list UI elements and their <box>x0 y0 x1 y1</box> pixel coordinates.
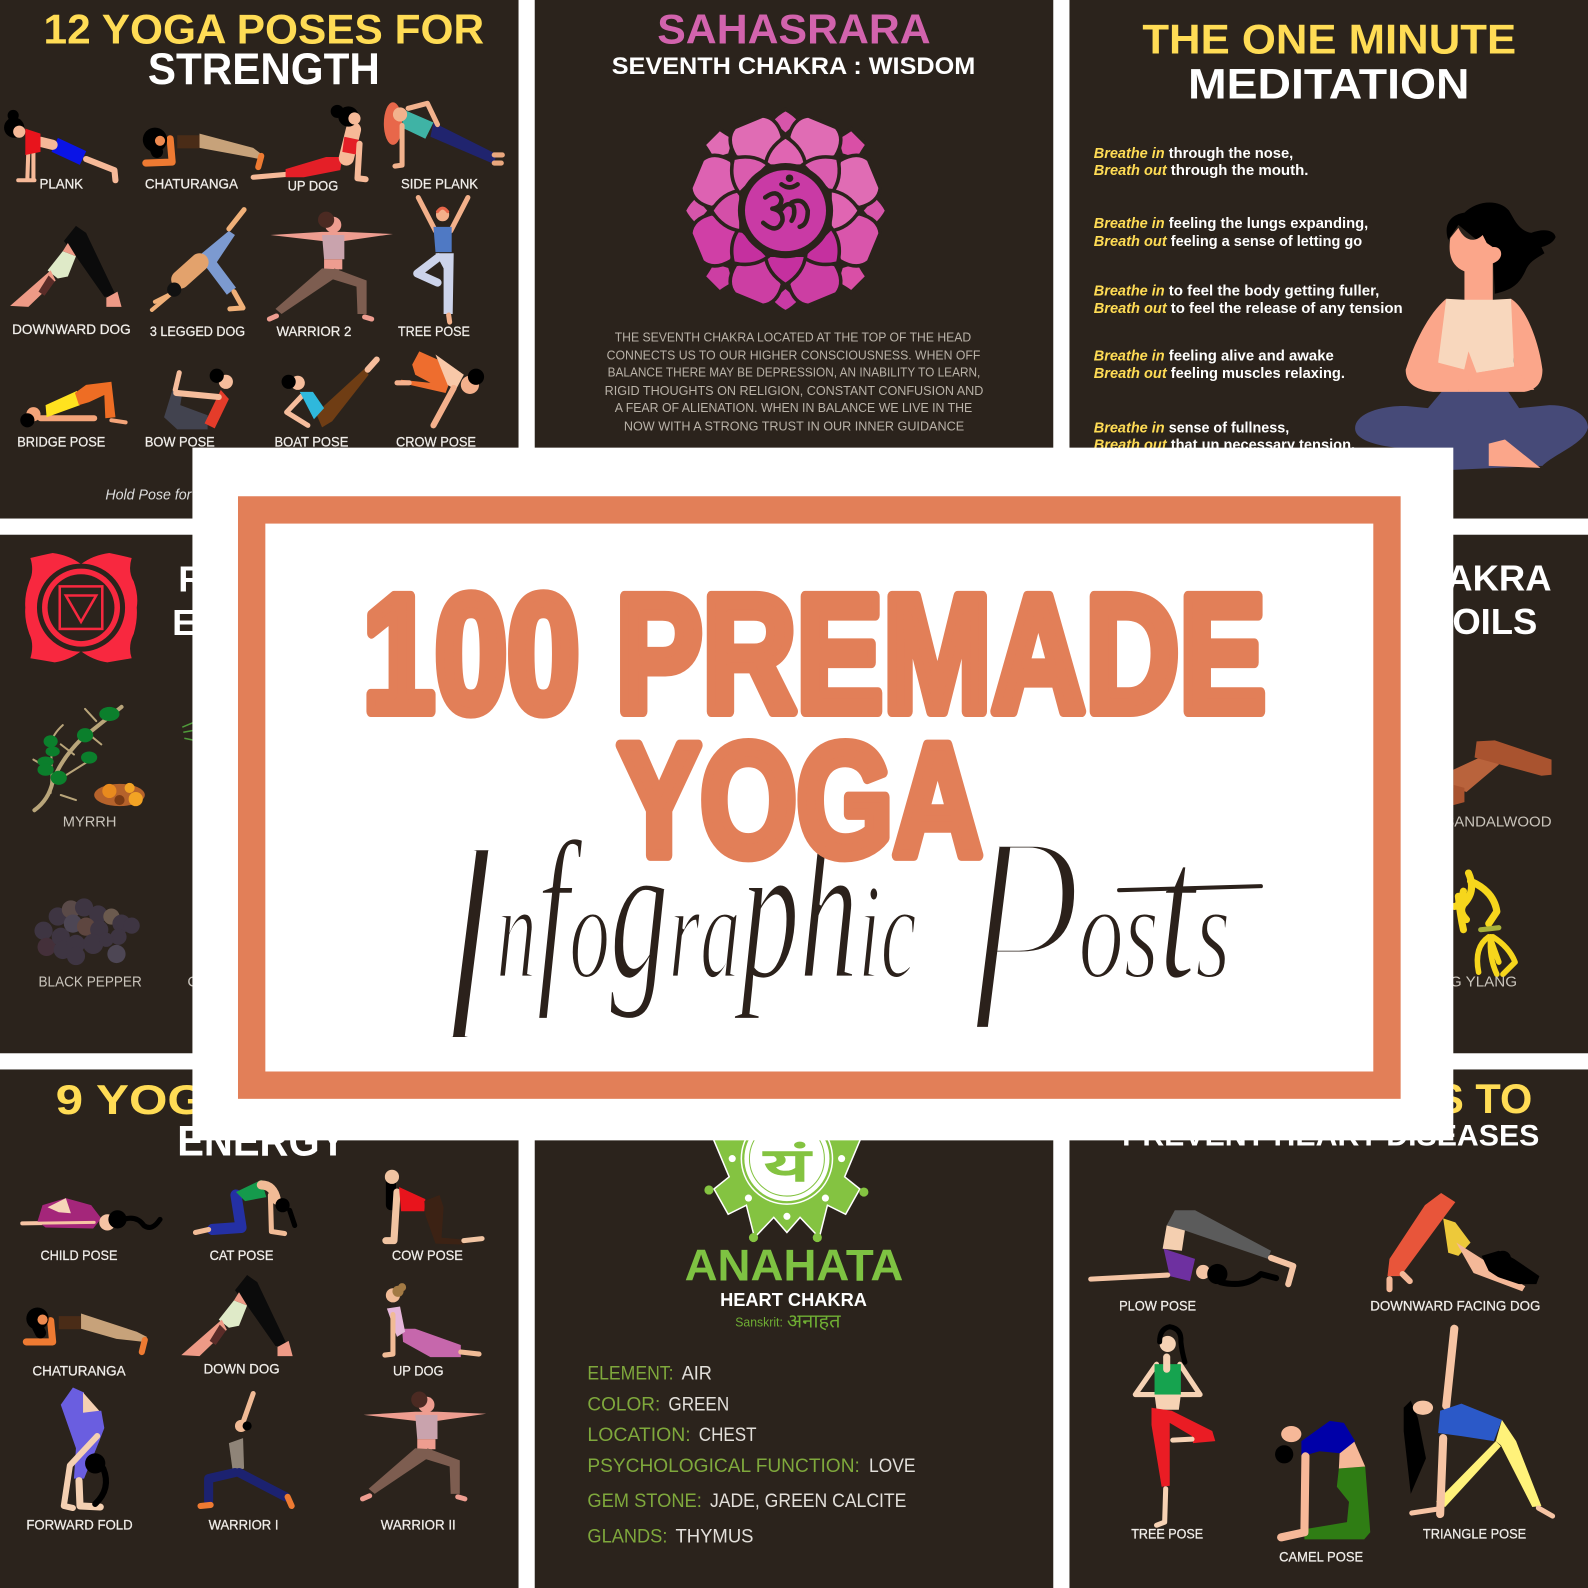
figure: up dog <box>385 1283 479 1357</box>
label: boat pose: BOAT POSE <box>274 435 348 450</box>
heading: root chakra essential oils, clipped: ESSENTIAL OILS <box>1238 601 1537 642</box>
text block: chakra attributes <box>587 1363 916 1547</box>
heading: 12 yoga poses for strength: 12 YOGA POSES FOR <box>44 6 484 53</box>
label: plank: PLANK <box>39 176 83 191</box>
card: central title <box>192 448 1453 1140</box>
text block: seventh chakra description: BALANCE THERE MAY BE DEPRESSION, AN INABILITY TO LEARN, <box>608 366 980 380</box>
figure: tree pose <box>1135 1327 1215 1525</box>
text block: breathing instructions: Breathe in <box>1094 145 1165 162</box>
label: downward dog: DOWNWARD DOG <box>12 322 131 337</box>
heading: anahata: HEART CHAKRA <box>720 1290 867 1310</box>
figure: side plank <box>384 102 502 166</box>
figure: 3 legged dog <box>152 210 244 310</box>
text block: chakra attributes: ELEMENT: <box>587 1363 673 1384</box>
label: up dog: UP DOG <box>393 1363 444 1378</box>
text block: chakra attributes: THYMUS <box>676 1526 753 1547</box>
text block: breathing instructions: Breath out <box>1094 300 1168 317</box>
figure: plow pose <box>1091 1210 1293 1284</box>
figure: bridge pose <box>20 382 126 427</box>
figure: chaturanga <box>26 1307 147 1352</box>
label: tree pose: TREE POSE <box>398 324 470 339</box>
panel: root chakra essential oils, left <box>0 535 519 1053</box>
label: downward facing dog: DOWNWARD FACING DOG <box>1370 1299 1540 1314</box>
label: sanskrit name: Sanskrit: <box>735 1316 783 1330</box>
heading: 12 yoga poses for strength: STRENGTH <box>148 45 380 94</box>
text block: breathing instructions: Breath out <box>1094 365 1168 382</box>
text block: breathing instructions: Breath out <box>1094 233 1168 250</box>
label: ylang ylang: YLANG YLANG <box>1410 973 1517 990</box>
figure: plank <box>4 110 115 180</box>
figure: up dog <box>253 105 366 179</box>
subheading: infographic posts script: P <box>954 771 1084 1097</box>
figure: camel pose <box>1275 1421 1370 1539</box>
figure: boat pose <box>282 360 377 427</box>
icon: crown chakra lotus <box>684 109 887 312</box>
heading: 9 yoga poses energy: ENERGY <box>177 1118 346 1166</box>
label: plow pose: PLOW POSE <box>1119 1299 1196 1314</box>
icon: heart chakra: यं <box>764 1139 812 1191</box>
figure: triangle pose <box>1404 1329 1553 1516</box>
figure: chaturanga <box>143 128 261 167</box>
heading: root chakra essential oils, clipped: ROOT CHAKRA <box>178 558 452 599</box>
text block: chakra attributes: GLANDS: <box>587 1526 667 1547</box>
text block: breathing instructions: Breathe in <box>1094 419 1165 436</box>
text block: seventh chakra description: CONNECTS US TO OUR HIGHER CONSCIOUSNESS. WHEN OFF <box>607 349 981 363</box>
figure: cat pose <box>195 1180 295 1234</box>
figure: tree pose <box>417 197 468 322</box>
label: triangle pose: TRIANGLE POSE <box>1423 1526 1526 1541</box>
heading: root chakra essential oils, clipped <box>1238 557 1552 642</box>
heading: the one minute meditation: THE ONE MINUTE <box>1142 16 1516 63</box>
panel: 12 yoga poses for strength <box>0 0 519 519</box>
text block: breathing instructions: feeling a sense of letting go <box>1171 233 1362 250</box>
text block: seventh chakra description: THE SEVENTH CHAKRA LOCATED AT THE TOP OF THE HEAD <box>615 330 971 344</box>
subheading: infographic posts script: osts <box>1079 801 1230 1020</box>
heading: root chakra essential oils, clipped: ROOT CHAKRA <box>1278 557 1552 598</box>
label: warrior 2: WARRIOR 2 <box>276 324 351 339</box>
label: down dog: DOWN DOG <box>204 1361 280 1376</box>
icon: root chakra <box>25 553 137 662</box>
text block: chakra attributes: PSYCHOLOGICAL FUNCTION: <box>587 1456 860 1477</box>
panel: poses to prevent heart diseases <box>1069 1069 1588 1588</box>
heading: 100 premade yoga: YOGA <box>618 710 982 889</box>
text block: chakra attributes: LOCATION: <box>587 1425 691 1446</box>
panel: anahata heart chakra <box>535 1069 1053 1588</box>
heading: sahasrara: SAHASRARA <box>657 6 931 53</box>
heading: root chakra essential oils, clipped <box>172 558 471 643</box>
text block: breathing instructions: Breath out <box>1094 437 1168 454</box>
text block: seventh chakra description: RIGID THOUGHTS ON RELIGION, CONSTANT CONFUSION AND <box>605 384 983 398</box>
figure: warrior I <box>201 1394 292 1506</box>
label: warrior I: WARRIOR I <box>209 1517 279 1532</box>
heading: 9 yoga poses energy <box>56 1076 542 1166</box>
subheading: infographic posts script <box>427 771 1230 1109</box>
figure: bow pose <box>164 369 233 429</box>
heading: yoga poses to prevent heart diseases <box>1122 1075 1539 1152</box>
text block: breathing instructions: sense of fullness, <box>1169 419 1289 436</box>
figure: cow pose <box>385 1170 482 1245</box>
text block: breathing instructions: feeling alive and awake <box>1169 348 1334 365</box>
panel: one minute meditation <box>1069 0 1588 519</box>
heading: the one minute meditation: MEDITATION <box>1188 61 1470 109</box>
icon: sandalwood logs <box>1453 740 1552 805</box>
label: side plank: SIDE PLANK <box>401 176 478 191</box>
text block: seventh chakra description <box>605 330 983 433</box>
label: bridge pose: BRIDGE POSE <box>17 435 105 450</box>
figure: downward dog <box>10 226 122 307</box>
panel: 9 yoga poses for energy <box>0 1069 542 1588</box>
figure: down dog <box>181 1275 293 1356</box>
text block: breathing instructions: Breathe in <box>1094 348 1165 365</box>
panel: root chakra essential oils, right <box>1069 535 1588 1053</box>
label: myrrh: MYRRH <box>63 813 116 830</box>
text block: breathing instructions: Breathe in <box>1094 283 1165 300</box>
text block: breathing instructions: feeling muscles relaxing. <box>1171 365 1345 382</box>
label: bow pose: BOW POSE <box>145 435 215 450</box>
text block: chakra attributes: AIR <box>682 1363 712 1384</box>
figure: forward fold <box>61 1387 106 1508</box>
text block: breathing instructions: to feel the body getting fuller, <box>1169 283 1379 300</box>
text block: breathing instructions: to feel the release of any tension <box>1171 300 1403 317</box>
label: crow pose: CROW POSE <box>396 435 476 450</box>
icon: om symbol <box>763 177 808 228</box>
text block: breathing instructions: through the nose, <box>1169 145 1293 162</box>
heading: yoga poses to prevent heart diseases: YOGA POSES TO <box>1189 1075 1532 1122</box>
label: camel pose: CAMEL POSE <box>1279 1550 1363 1565</box>
heading: sahasrara <box>612 6 975 80</box>
icon: black pepper <box>34 898 140 965</box>
label: warrior II: WARRIOR II <box>381 1517 456 1532</box>
heading: 100 premade yoga <box>363 561 1266 889</box>
label: chaturanga: CHATURANGA <box>145 176 239 191</box>
figure: warrior II <box>363 1392 486 1499</box>
label: cat pose: CAT POSE <box>210 1248 273 1263</box>
text block: chakra attributes: GEM STONE: <box>587 1491 702 1512</box>
flourish: script crossbar <box>1119 886 1261 890</box>
subheading: infographic posts script: I <box>427 772 513 1109</box>
label: chaturanga: CHATURANGA <box>32 1363 126 1378</box>
label: sanskrit name: अनाहत <box>787 1312 842 1333</box>
heading: 9 yoga poses energy: 9 YOGA POSES FOR <box>56 1076 542 1123</box>
heading: root chakra essential oils, clipped: ESSENTIAL OILS <box>172 602 471 643</box>
note: hold pose: Hold Pose for <box>105 486 192 503</box>
icon: myrrh branch and resin <box>33 707 145 810</box>
heading: sahasrara: SEVENTH CHAKRA : WISDOM <box>612 53 975 80</box>
icon: heart chakra <box>704 1080 868 1242</box>
label: 3 legged dog: 3 LEGGED DOG <box>150 324 245 339</box>
figure: warrior 2 <box>269 212 393 319</box>
text block: seventh chakra description: NOW WITH A STRONG TRUST IN OUR INNER GUIDANCE <box>624 419 964 433</box>
text block: chakra attributes: COLOR: <box>587 1394 660 1415</box>
label: forward fold: FORWARD FOLD <box>26 1517 133 1532</box>
subheading: infographic posts script: nfographic <box>496 801 917 1020</box>
label: tree pose: TREE POSE <box>1131 1526 1203 1541</box>
figure: meditating woman <box>1355 202 1588 470</box>
icon: clipped herb <box>182 722 194 740</box>
text block: chakra attributes: CHEST <box>699 1425 757 1446</box>
text block: breathing instructions: that un necessary tension. <box>1171 437 1355 454</box>
figure: downward facing dog <box>1387 1193 1539 1291</box>
text block: breathing instructions: Breathe in <box>1094 215 1165 232</box>
text block: breathing instructions: feeling the lungs expanding, <box>1169 215 1368 232</box>
heading: anahata: ANAHATA <box>685 1242 903 1291</box>
label: black pepper: BLACK PEPPER <box>38 973 142 990</box>
icon: ylang ylang flowers <box>1454 873 1515 974</box>
label: sanskrit name <box>735 1312 842 1333</box>
heading: yoga poses to prevent heart diseases: PREVENT HEART DISEASES <box>1122 1119 1539 1152</box>
panel: sahasrara <box>535 0 1053 519</box>
label: cow pose: COW POSE <box>392 1248 463 1263</box>
panel: centre hidden <box>535 535 1053 1053</box>
label: sandalwood: SANDALWOOD <box>1444 813 1552 830</box>
heading: the one minute meditation <box>1142 16 1516 109</box>
frame: orange border <box>252 510 1387 1085</box>
text block: breathing instructions: through the mouth. <box>1171 162 1308 179</box>
figure: crow pose <box>397 351 484 425</box>
text block: breathing instructions <box>1094 145 1403 454</box>
text block: seventh chakra description: A FEAR OF ALIENATION. WHEN IN BALANCE WE LIVE IN THE <box>615 401 972 415</box>
text block: chakra attributes: GREEN <box>668 1394 729 1415</box>
text block: breathing instructions: Breath out <box>1094 162 1168 179</box>
heading: 12 yoga poses for strength <box>44 6 484 94</box>
figure: child pose <box>22 1198 160 1230</box>
text block: chakra attributes: LOVE <box>869 1456 916 1477</box>
text block: chakra attributes: JADE, GREEN CALCITE <box>710 1491 906 1512</box>
label: up dog: UP DOG <box>288 178 338 193</box>
label: child pose: CHILD POSE <box>41 1248 117 1263</box>
heading: 100 premade yoga: 100 PREMADE <box>363 561 1266 747</box>
label: clipped oil name: CEDARWOOD <box>187 973 289 990</box>
